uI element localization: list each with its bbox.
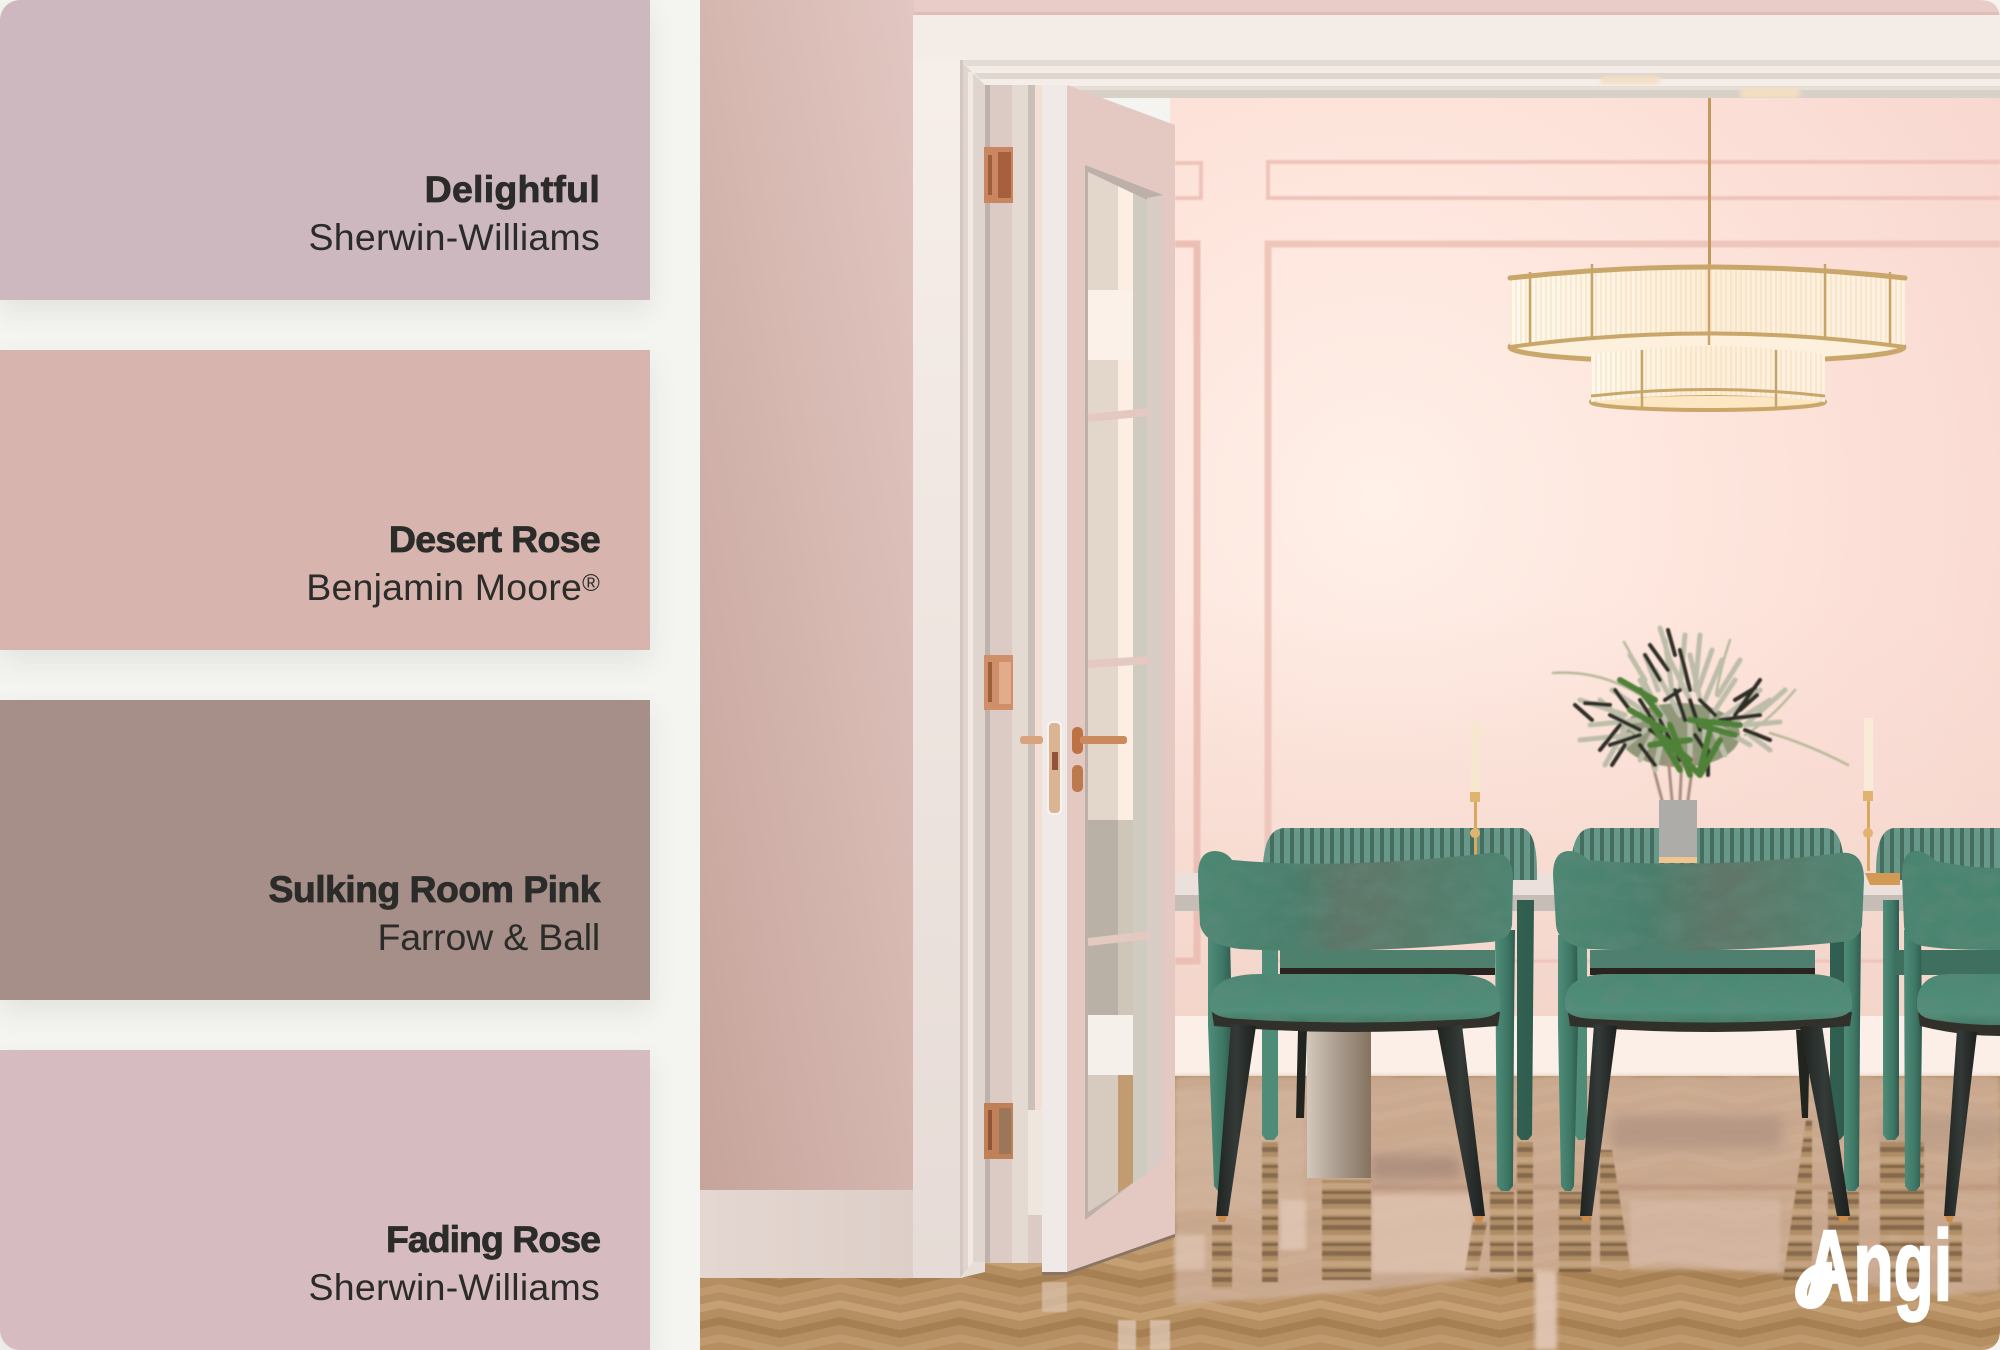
icon: middle hinge — [984, 655, 1013, 710]
wall panel mouldings — [1175, 162, 2000, 961]
panel: dining room scene — [700, 0, 2000, 1350]
back chair A — [1262, 828, 1537, 1140]
upper drum shade — [1510, 264, 1905, 347]
table top — [1175, 873, 1905, 911]
front chair 2 — [1553, 851, 1864, 1222]
door jamb — [990, 85, 1042, 1263]
door frame — [913, 15, 2000, 1278]
table pedestal — [1307, 945, 1371, 1178]
swatch name: Delightful — [425, 168, 600, 210]
back room wall — [1170, 90, 2000, 1080]
panel: swatch Fading Rose — [0, 1050, 650, 1350]
swatch name: Sulking Room Pink — [268, 868, 600, 910]
icon: bottom hinge — [984, 1103, 1013, 1159]
swatch brand: Farrow & Ball — [378, 916, 600, 958]
swatch brand: Sherwin-Williams — [308, 1266, 600, 1308]
candle right — [1863, 718, 1900, 885]
lower drum — [1591, 346, 1825, 410]
back chair C — [1876, 828, 2000, 1140]
foliage — [1553, 628, 1848, 800]
front chair 3 — [1902, 851, 2000, 1222]
panel: swatch Desert Rose — [0, 350, 650, 650]
back chair B — [1571, 828, 1844, 1140]
chandelier — [1510, 98, 1905, 410]
door glass pane — [1085, 165, 1163, 1220]
plant in vase — [1553, 628, 1848, 863]
panel: swatch Sulking Room Pink — [0, 700, 650, 1000]
top wall strip — [914, 0, 2000, 15]
swatch brand: Sherwin-Williams — [308, 216, 600, 258]
vase — [1659, 800, 1697, 863]
floor — [700, 1076, 2000, 1350]
left wall — [700, 0, 914, 1278]
swatch name: Fading Rose — [386, 1218, 600, 1260]
rod — [1708, 98, 1711, 268]
swatch brand: Benjamin Moore® — [306, 566, 600, 608]
panel: swatch Delightful — [0, 0, 650, 300]
open door — [1042, 85, 1175, 1275]
floor reflections near door — [1042, 1282, 1170, 1350]
candle left — [1470, 722, 1480, 864]
door handle — [1020, 721, 1127, 815]
door muntins — [1088, 412, 1150, 942]
lower ring upper drum — [1510, 332, 1904, 362]
front chair 1 — [1198, 851, 1515, 1222]
icon: top hinge — [984, 147, 1013, 203]
swatch name: Desert Rose — [389, 518, 600, 560]
